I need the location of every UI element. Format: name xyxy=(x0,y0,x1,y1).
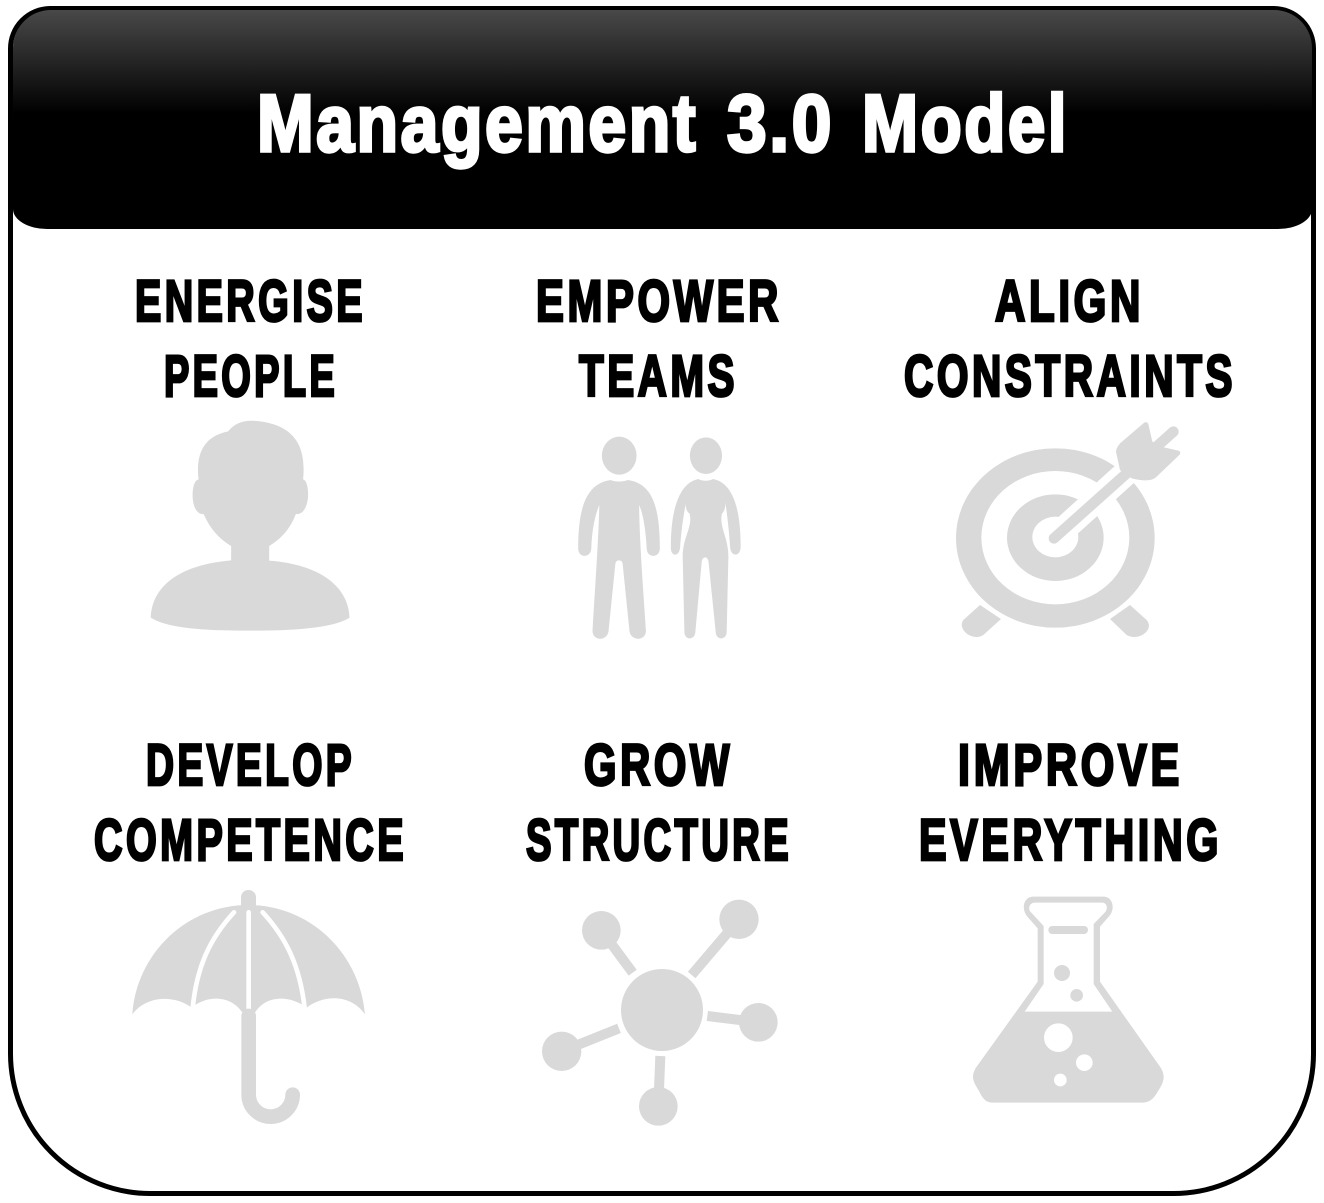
icon: network xyxy=(542,900,778,1126)
heading: develop competence xyxy=(94,733,407,873)
title: Management xyxy=(257,79,698,169)
heading: empower teams: EMPOWER xyxy=(536,269,782,334)
icon: flask xyxy=(973,897,1164,1103)
heading: grow structure: STRUCTURE xyxy=(526,808,792,873)
icon: target with arrow xyxy=(956,422,1180,637)
icon: umbrella xyxy=(132,890,365,1117)
header band xyxy=(13,10,1312,229)
heading: align constraints: ALIGN xyxy=(995,269,1144,334)
icon: man and woman xyxy=(578,437,741,639)
panel: develop competence xyxy=(94,733,407,1117)
heading: empower teams: TEAMS xyxy=(579,344,738,409)
heading: empower teams xyxy=(536,269,782,409)
heading: energise people: ENERGISE xyxy=(135,269,366,334)
title: 3.0 xyxy=(727,79,834,169)
panel: empower teams xyxy=(536,269,782,639)
title: Model xyxy=(862,79,1069,169)
panel: energise people xyxy=(135,269,366,631)
heading: develop competence: DEVELOP xyxy=(146,733,355,798)
icon: person bust xyxy=(151,421,350,631)
heading: energise people: PEOPLE xyxy=(164,344,338,409)
heading: improve everything: IMPROVE xyxy=(958,733,1183,798)
heading: align constraints xyxy=(904,269,1236,409)
panel: grow structure xyxy=(526,733,792,1126)
panel: improve everything xyxy=(919,733,1222,1103)
heading: develop competence: COMPETENCE xyxy=(94,808,407,873)
heading: energise people xyxy=(135,269,366,409)
heading: improve everything xyxy=(919,733,1222,873)
heading: grow structure xyxy=(526,733,792,873)
panel: align constraints xyxy=(904,269,1236,637)
heading: grow structure: GROW xyxy=(584,733,733,798)
